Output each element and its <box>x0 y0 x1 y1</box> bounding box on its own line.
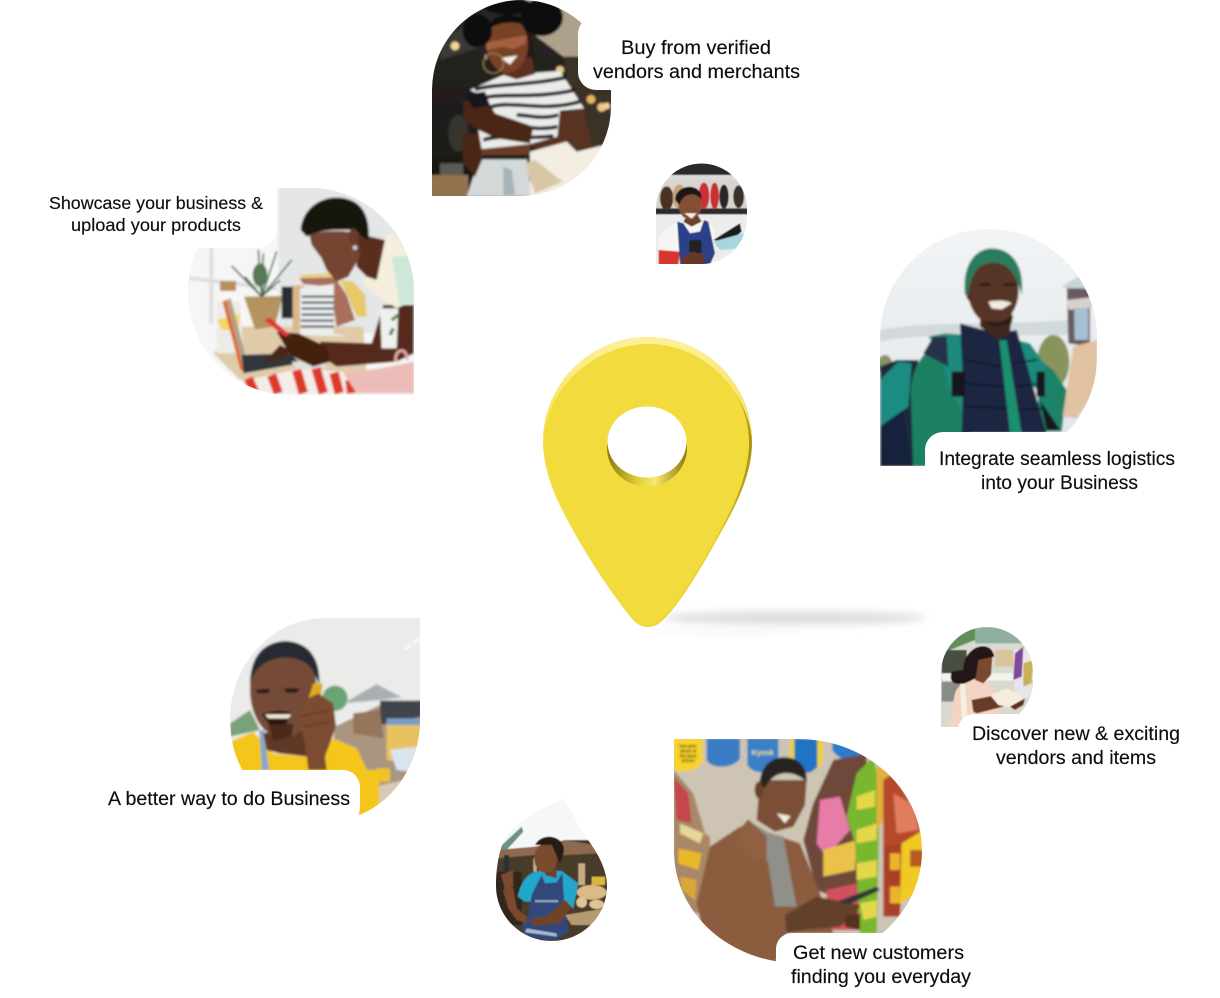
photo: shopkeeper with tablet in kiosk <box>674 739 922 962</box>
panel: showcase your business <box>50 188 414 395</box>
panel: a better way to do business <box>108 618 420 816</box>
caption: vendors and items <box>996 748 1156 769</box>
photo: delivery rider in green <box>880 229 1097 466</box>
photo: shoe seller with phone <box>656 164 747 264</box>
photo: man on phone at market <box>230 618 420 816</box>
photo: woman in zebra shirt with phone <box>432 0 611 196</box>
label backing <box>925 432 1190 502</box>
photo: shopkeeper with tablet in kiosk: Get your <box>679 743 697 748</box>
caption <box>939 449 1175 494</box>
label backing <box>95 770 360 824</box>
caption: Buy from verified <box>621 37 771 59</box>
caption <box>49 193 263 235</box>
photo: shopkeeper with tablet in kiosk: prices <box>682 758 695 763</box>
caption: upload your products <box>71 215 241 235</box>
caption: finding you everyday <box>791 967 972 988</box>
caption: Integrate seamless logistics <box>939 449 1175 470</box>
caption: Showcase your business & <box>49 193 263 213</box>
label backing <box>958 714 1193 778</box>
photo: vendor in blue apron with phone <box>496 800 607 941</box>
photo: shopkeeper with tablet in kiosk: the best <box>680 753 697 758</box>
photo: shopper reading product label <box>941 627 1033 727</box>
panel: buy from verified vendors <box>420 0 800 207</box>
icon: yellow location pin <box>543 337 752 627</box>
label backing <box>578 16 668 90</box>
photo: shopkeeper with tablet in kiosk: Kyosk <box>752 748 775 757</box>
label backing <box>776 933 991 998</box>
panel: integrate seamless logistics <box>880 229 1174 494</box>
caption: Get new customers <box>793 943 964 964</box>
photo: woman at laptop with clothes <box>188 188 414 395</box>
pin ground shadow <box>650 611 927 633</box>
caption: Discover new & exciting <box>972 724 1180 745</box>
caption <box>791 943 972 988</box>
panel: discover new vendors <box>941 627 1179 764</box>
panel: get new customers <box>674 739 971 988</box>
caption: into your Business <box>981 473 1138 494</box>
caption: A better way to do Business <box>108 789 350 810</box>
label backing <box>30 170 277 248</box>
caption <box>972 724 1180 769</box>
photo: shopkeeper with tablet in kiosk: stock at <box>680 749 697 754</box>
caption <box>593 37 800 83</box>
caption: vendors and merchants <box>593 61 800 83</box>
